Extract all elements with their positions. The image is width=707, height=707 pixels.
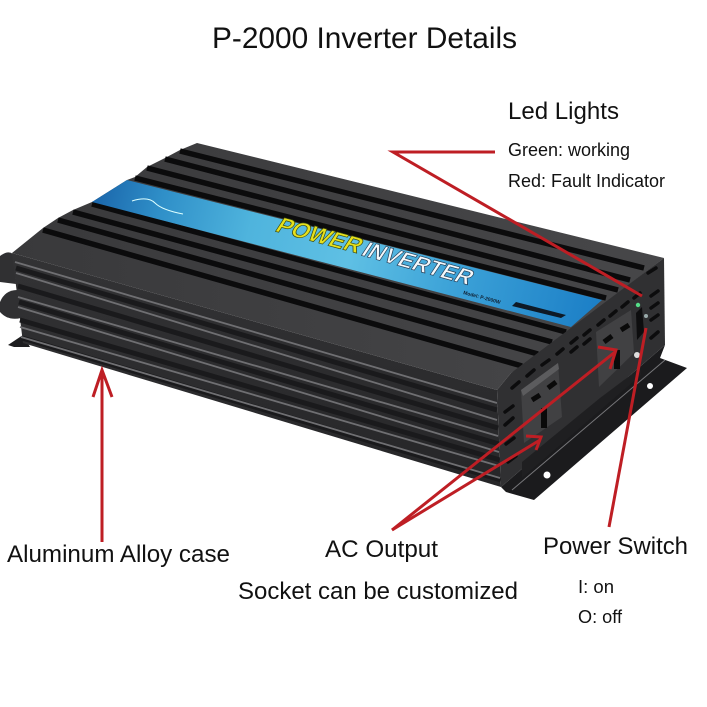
brand text: POWER (271, 213, 369, 258)
front panel (497, 258, 665, 487)
label: power switch: O: off (578, 607, 623, 627)
terminal blocks (522, 368, 641, 478)
title: P-2000 Inverter Details (212, 22, 517, 55)
label: led lights: Green: working (508, 140, 630, 160)
label: led lights: Red: Fault Indicator (508, 171, 665, 191)
arrow: led lights (393, 152, 642, 296)
cables at the back (0, 252, 21, 319)
inverter product illustration (0, 143, 687, 500)
power switch (636, 303, 648, 340)
label: power switch: Power Switch (543, 533, 688, 560)
blue label: INVERTER (357, 238, 479, 289)
logo (132, 199, 183, 214)
socket left (521, 363, 562, 443)
label: power switch (543, 533, 688, 627)
callout arrows (93, 152, 646, 542)
label: power switch: I: on (578, 577, 614, 597)
blue label: Model: P-2000W (462, 290, 501, 306)
top surface (12, 143, 664, 390)
label: led lights: Led Lights (508, 98, 619, 125)
label: ac output: AC Output (325, 536, 438, 563)
arrow: ac output (392, 347, 616, 530)
arrow: power switch (609, 328, 646, 527)
side panel with ribs (12, 253, 501, 487)
arrow: aluminum case (93, 370, 112, 542)
socket right (596, 310, 634, 387)
label: ac output (238, 536, 518, 605)
ventilation slots (505, 268, 658, 462)
label: aluminum alloy case: Aluminum Alloy case (7, 541, 230, 568)
label: led lights (508, 98, 665, 191)
label: ac output: Socket can be customized (238, 578, 518, 605)
heat sink grooves (43, 151, 644, 366)
blue label (92, 180, 602, 327)
mounting flange (8, 335, 687, 500)
